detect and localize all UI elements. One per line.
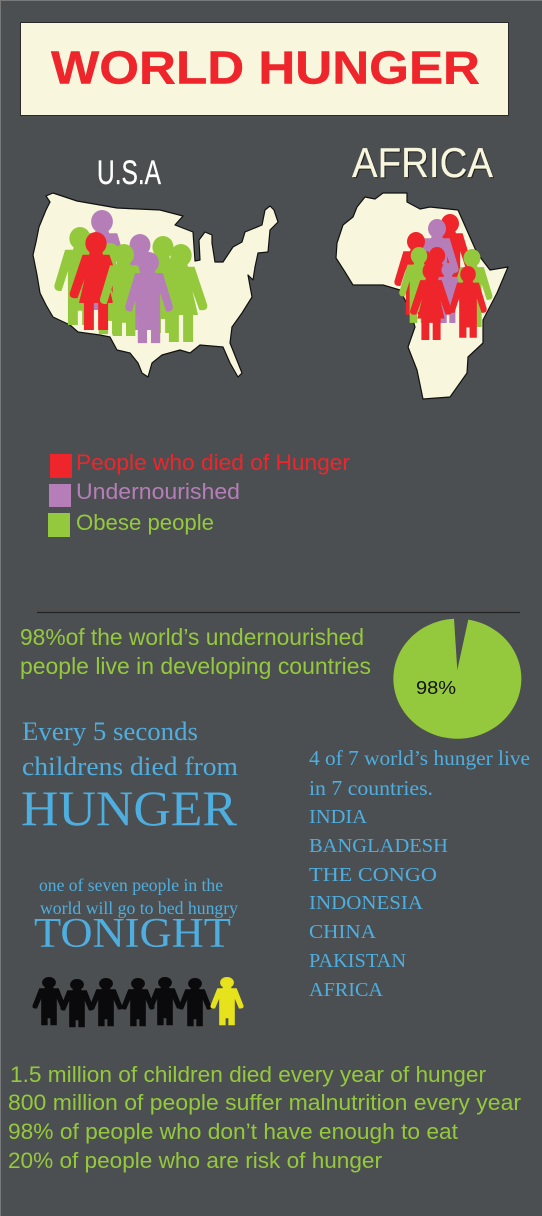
text block: every 5 seconds: HUNGER xyxy=(21,780,238,836)
text block: seven countries: in 7 countries. xyxy=(309,776,433,800)
text block: tonight: TONIGHT xyxy=(34,911,231,957)
title xyxy=(20,22,508,116)
text block: hunger statistics: 1.5 million of children died every year of hunger xyxy=(10,1062,486,1087)
text block: 98% undernourished: people live in developing countries xyxy=(20,653,371,679)
people: USA figures xyxy=(54,210,207,343)
heading: AFRICA: AFRICA xyxy=(352,139,493,186)
text block: seven countries: 4 of 7 world’s hunger live xyxy=(309,746,530,770)
map: USA outline xyxy=(33,193,278,377)
heading: U.S.A: U.S.A xyxy=(97,154,161,192)
text block: hunger statistics xyxy=(8,1062,521,1173)
text block: 98% undernourished: 98%of the world’s undernourished xyxy=(20,624,364,650)
people: Africa figures xyxy=(394,214,492,340)
text block: seven countries: PAKISTAN xyxy=(309,950,406,972)
text block: tonight xyxy=(34,875,238,957)
pie chart: 98%: 98% xyxy=(416,678,456,698)
text block: every 5 seconds: childrens died from xyxy=(22,752,238,781)
map: Africa outline xyxy=(336,193,508,399)
text block: hunger statistics: 98% of people who don’t have enough to eat xyxy=(8,1119,458,1144)
legend: obese: Obese people xyxy=(76,510,214,535)
text block: every 5 seconds xyxy=(21,717,238,836)
icon row: seven people, one yellow xyxy=(32,977,244,1027)
text block: seven countries: INDIA xyxy=(309,806,368,828)
legend: undernourished: Undernourished xyxy=(76,479,240,504)
text block: seven countries: BANGLADESH xyxy=(309,835,448,857)
text block: seven countries: AFRICA xyxy=(309,979,384,1001)
text block: tonight: world will go to bed hungry xyxy=(40,898,238,918)
text block: hunger statistics: 20% of people who are risk of hunger xyxy=(8,1148,382,1173)
pie chart: 98% xyxy=(393,619,521,739)
text block: seven countries xyxy=(309,746,530,1001)
text block: tonight: one of seven people in the xyxy=(39,875,223,895)
text block: every 5 seconds: Every 5 seconds xyxy=(22,717,198,746)
text block: seven countries: CHINA xyxy=(309,921,377,943)
title: WORLD HUNGER xyxy=(51,42,480,94)
text block: seven countries: THE CONGO xyxy=(309,864,437,886)
text block: hunger statistics: 800 million of people suffer malnutrition every year xyxy=(8,1090,521,1115)
panel: Africa xyxy=(336,139,508,399)
text block: seven countries: INDONESIA xyxy=(309,892,424,914)
legend: died of hunger: People who died of Hunger xyxy=(76,450,350,475)
panel: USA xyxy=(33,154,278,377)
legend xyxy=(48,450,350,537)
text block: 98% undernourished xyxy=(20,624,371,679)
